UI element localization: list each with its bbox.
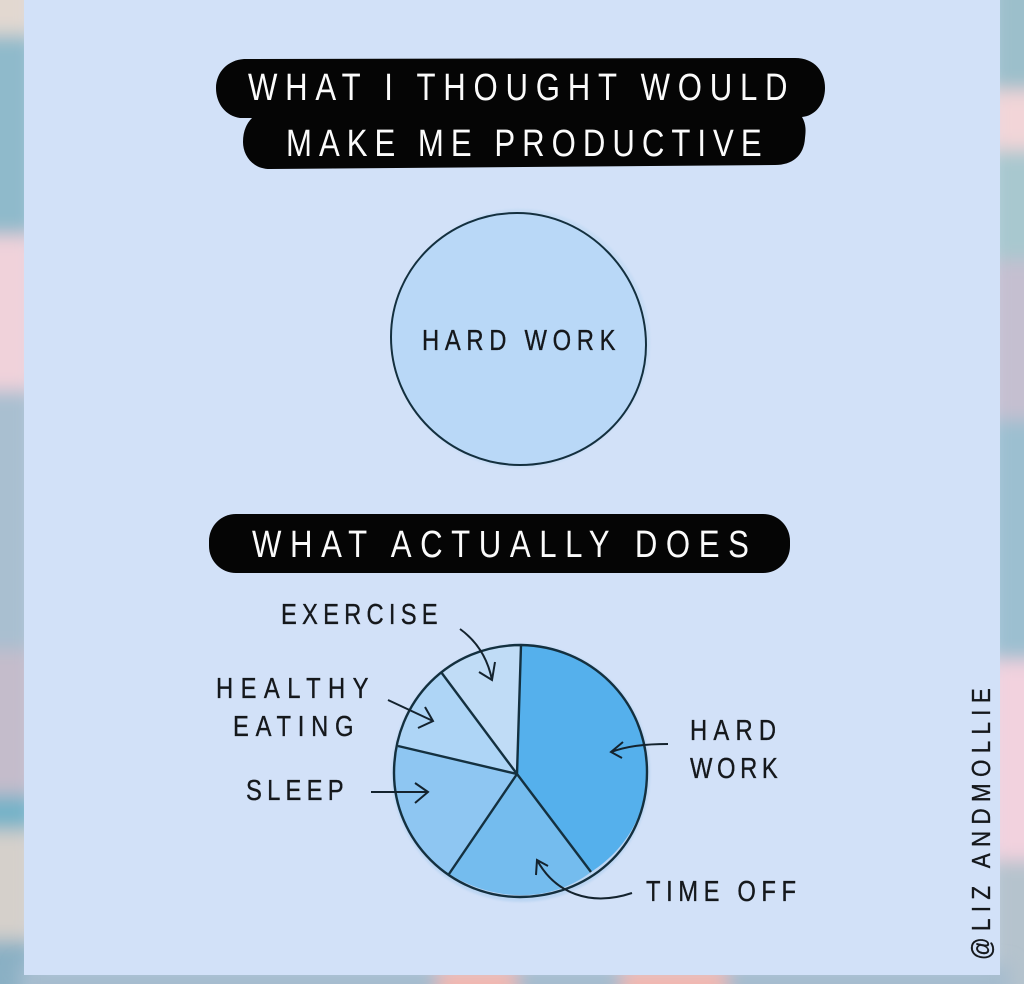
slice: sleep bbox=[393, 746, 517, 874]
slice: healthy eating bbox=[398, 672, 517, 774]
arrow: hard work bbox=[611, 742, 668, 758]
arrow: time off bbox=[536, 860, 632, 898]
label: hard work: HARD bbox=[690, 714, 776, 747]
pie 1 label: HARD WORK bbox=[422, 324, 616, 357]
heading 1 line 1: WHAT I THOUGHT WOULD bbox=[248, 67, 788, 109]
blurred background: bottom strip bbox=[20, 965, 1010, 984]
arrow: exercise bbox=[460, 629, 495, 680]
label: hard work: WORK bbox=[690, 752, 778, 785]
pie 2: productivity breakdown bbox=[392, 644, 650, 902]
pie 1: hard work circle bbox=[391, 209, 650, 468]
label: healthy eating bbox=[216, 672, 369, 743]
label: healthy eating: HEALTHY bbox=[216, 672, 369, 705]
arrow: healthy eating bbox=[388, 700, 433, 728]
credit: @LIZ ANDMOLLIE bbox=[967, 688, 996, 960]
label: sleep: SLEEP bbox=[246, 774, 344, 807]
blurred background: left strip bbox=[0, 0, 35, 984]
arrow: sleep bbox=[371, 783, 428, 803]
label: healthy eating: EATING bbox=[233, 710, 354, 743]
heading 1: black banner bbox=[216, 58, 825, 169]
slice: time off bbox=[449, 774, 591, 895]
label: time off: TIME OFF bbox=[646, 875, 796, 908]
blurred background: right strip bbox=[990, 0, 1024, 984]
heading 1 line 2: MAKE ME PRODUCTIVE bbox=[286, 123, 762, 165]
label: hard work bbox=[690, 714, 778, 785]
slice: hard work bbox=[517, 645, 647, 872]
label: exercise: EXERCISE bbox=[281, 598, 438, 631]
slice: exercise bbox=[441, 645, 521, 774]
heading 2: black banner bbox=[209, 514, 790, 573]
heading 2 text: WHAT ACTUALLY DOES bbox=[252, 524, 749, 566]
